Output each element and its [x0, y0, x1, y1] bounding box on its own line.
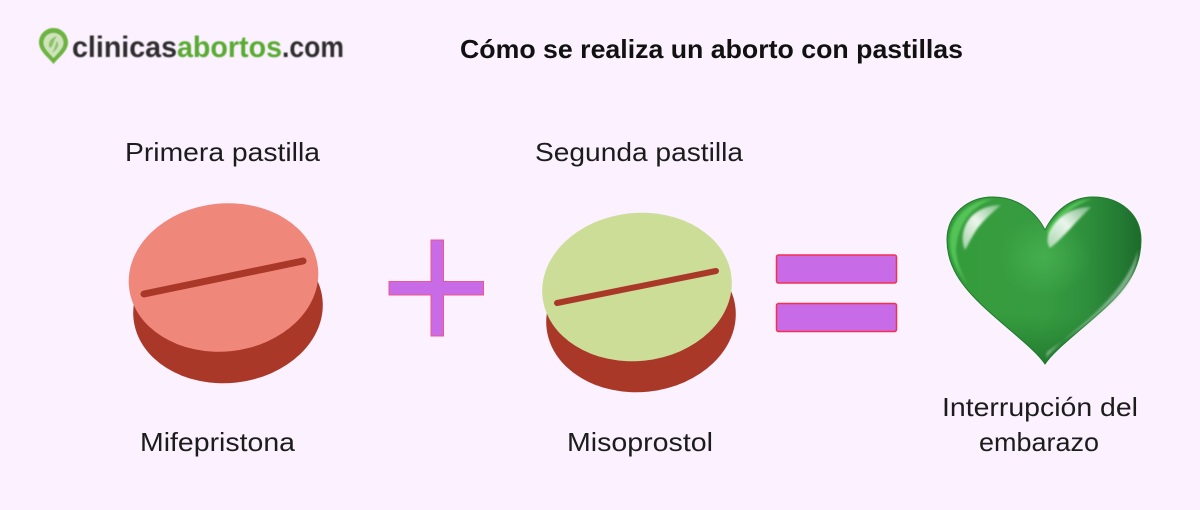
heart body	[947, 197, 1141, 364]
logo text: .com	[282, 31, 344, 64]
pill score line	[144, 261, 303, 294]
label: misoprostol: Misoprostol	[567, 427, 713, 457]
right lobe rim light	[1047, 199, 1092, 238]
heading: segunda pastilla: Segunda pastilla	[535, 137, 744, 167]
operator: plus	[389, 240, 484, 336]
highlight: right lobe	[1048, 207, 1091, 248]
icon: green location pin	[39, 28, 68, 64]
pill: mifepristona	[121, 194, 330, 393]
heading: primera pastilla: Primera pastilla	[125, 137, 321, 167]
logo text: abortos	[177, 31, 282, 64]
pill top	[121, 194, 326, 361]
logo: clinicasabortos.com	[39, 28, 344, 64]
pill side	[539, 234, 743, 402]
pill: misoprostol	[535, 203, 743, 402]
pill side	[126, 225, 330, 393]
heart centre glow	[947, 197, 1141, 364]
title: Cómo se realiza un aborto con pastillas	[460, 34, 963, 64]
pill score line	[557, 271, 716, 303]
label: interrupción del embarazo: Interrupción del	[942, 392, 1138, 422]
label: interrupción del embarazo	[942, 392, 1138, 457]
operator: equals	[776, 255, 896, 332]
label: interrupción del embarazo: embarazo	[979, 427, 1099, 457]
label: mifepristona: Mifepristona	[140, 427, 296, 457]
heart rim shine	[1046, 250, 1138, 358]
heart lower shading	[947, 197, 1141, 364]
icon: green heart	[947, 197, 1141, 364]
highlight: left lobe	[963, 205, 1001, 250]
logo text: clinicas	[72, 31, 177, 64]
pill top	[535, 203, 739, 371]
left rim light	[950, 199, 993, 285]
